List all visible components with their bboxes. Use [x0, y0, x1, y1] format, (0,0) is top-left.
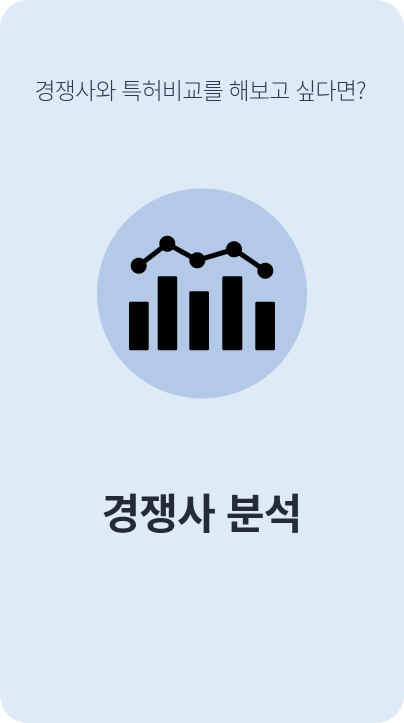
trend line with dots — [131, 236, 273, 279]
subtitle text: 경쟁사와 특허비교를 해보고 싶다면? — [34, 72, 366, 106]
title: 경쟁사 분석 — [101, 491, 302, 538]
bars — [129, 276, 275, 350]
icon background circle — [97, 188, 307, 398]
